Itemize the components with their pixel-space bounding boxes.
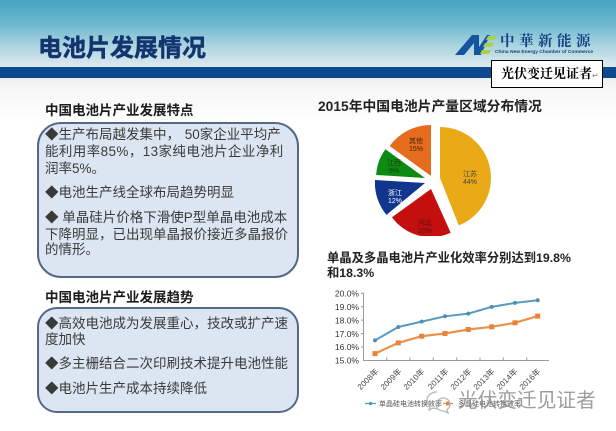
heading: pie chart: 2015年中国电池片产量区域分布情况: [318, 99, 542, 114]
header gradient band: [0, 0, 616, 67]
feature 1 text: ◆生产布局越发集中， 50家企业平均产: [45, 127, 281, 142]
feature 1 text: 能利用率85%，13家纯电池片企业净利: [45, 144, 284, 159]
feature 3 text: 下降明显，已出现单晶报价接近多晶报价: [45, 227, 288, 242]
feature 3 text: ◆ 单晶硅片价格下滑使P型单晶电池成本: [45, 210, 287, 225]
title: 电池片发展情况: [38, 35, 206, 62]
axes: [361, 293, 549, 360]
heading: features: 中国电池片产业发展特点: [45, 103, 194, 118]
trend 1 text: [45, 316, 288, 347]
series: multicrystalline: [372, 314, 540, 356]
logo: China New Energy Chamber of Commerce: [495, 50, 593, 55]
x axis labels: 2014年: [494, 366, 519, 392]
wechat watermark icon: [426, 391, 451, 414]
logo: 中華新能源: [500, 34, 595, 50]
legend: [365, 399, 521, 408]
slice: Jiangxi 9%: 9%: [389, 168, 399, 175]
heading: trends: 中国电池片产业发展趋势: [45, 290, 194, 305]
heading: efficiency chart: 和18.3%: [327, 266, 374, 280]
feature 3 text: [45, 210, 288, 257]
slice: Zhejiang 12%: 12%: [388, 198, 402, 205]
heading: efficiency chart: [327, 251, 571, 280]
series: monocrystalline: [373, 298, 540, 342]
slice: Jiangsu 44%: 江苏: [463, 169, 477, 178]
slice: Jiangsu 44%: 44%: [463, 179, 477, 186]
watermark label box: 光伏变迁见证者↵: [501, 66, 599, 81]
panel: features: [37, 122, 299, 278]
slice: Other 15%: 其他: [409, 136, 423, 145]
y axis labels: 20.0%: [335, 288, 359, 298]
trend 3 text: ◆电池片生产成本持续降低: [45, 381, 207, 396]
pie chart: [374, 125, 491, 236]
trend 1 text: 度加快: [45, 332, 86, 347]
slice: Zhejiang 12%: [375, 180, 425, 215]
slice: Other 15%: 15%: [409, 146, 423, 153]
trend 1 text: ◆高效电池成为发展重心，技改或扩产速: [45, 316, 288, 331]
feature 2 text: ◆电池生产线全球布局趋势明显: [45, 185, 234, 200]
y axis labels: 19.0%: [335, 302, 359, 312]
header dark blue bar: [0, 67, 616, 78]
slice: Jiangxi 9%: [376, 149, 425, 178]
slice: Jiangsu 44%: [440, 127, 491, 225]
x axis labels: 2009年: [378, 366, 403, 392]
x axis labels: 2016年: [517, 366, 542, 392]
feature 1 text: [45, 127, 284, 176]
x axis labels: 2008年: [355, 366, 380, 392]
slice: Hebei 20%: 河北: [418, 219, 432, 227]
y axis labels: 15.0%: [335, 356, 359, 366]
y axis labels: 16.0%: [335, 342, 359, 352]
feature 1 text: 润率5%。: [45, 161, 105, 176]
logo: [455, 33, 595, 55]
x axis labels: 2011年: [426, 366, 450, 391]
x axis labels: 2012年: [448, 366, 473, 392]
x axis labels: [355, 366, 542, 392]
y axis labels: [335, 288, 359, 366]
feature 3 text: 的情形。: [45, 242, 99, 257]
x axis labels: 2010年: [401, 366, 426, 392]
legend: 多晶硅电池转换效率: [458, 399, 521, 408]
slice: Other 15%: [390, 125, 431, 176]
legend: 单晶硅电池转换效率: [379, 399, 442, 408]
slice: Hebei 20%: [392, 189, 451, 237]
x axis labels: 2013年: [471, 366, 496, 392]
slice: Jiangxi 9%: 江西: [387, 159, 401, 167]
watermark label box: [491, 60, 603, 88]
panel: trends: [37, 307, 299, 413]
heading: efficiency chart: 单晶及多晶电池片产业化效率分别达到19.8%: [327, 251, 571, 265]
slice: Hebei 20%: 20%: [418, 228, 432, 235]
watermark text: 光伏变迁见证者: [458, 390, 596, 412]
y axis labels: 17.0%: [335, 329, 359, 339]
trend 2 text: ◆多主栅结合二次印刷技术提升电池性能: [45, 356, 288, 371]
line chart: [335, 288, 549, 408]
y axis labels: 18.0%: [335, 316, 359, 326]
slice: Zhejiang 12%: 浙江: [388, 188, 402, 197]
